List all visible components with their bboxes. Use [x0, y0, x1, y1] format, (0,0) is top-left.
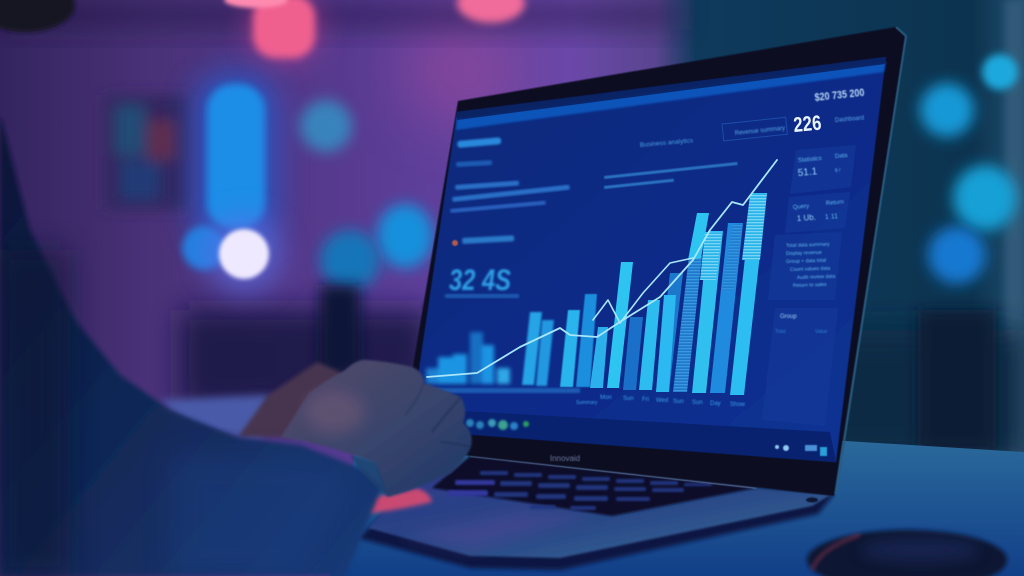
painting on wall: [104, 95, 189, 210]
side panel texts: Value: [815, 329, 828, 335]
side panel texts: Display revenue: [786, 250, 822, 257]
axis labels: Summary: [576, 400, 598, 406]
header labels: 226: [792, 112, 822, 137]
head silhouette at top left: [0, 0, 75, 32]
side panel texts: Group + data total: [786, 258, 826, 265]
side panel texts: 9 /: [835, 167, 841, 174]
header labels: Dashboard: [835, 115, 864, 124]
computer mouse: [807, 530, 1007, 576]
side panel texts: 1 Ub.: [797, 213, 816, 223]
neon blue pillar and white orb lamp: [182, 70, 282, 292]
side panel texts: Data: [835, 153, 848, 160]
low blurred bars: [426, 332, 510, 384]
axis labels: Show: [730, 402, 746, 408]
laptop lid and bezel: [403, 27, 906, 496]
bars: [522, 312, 542, 385]
axis labels: Fri: [642, 397, 649, 403]
side panel texts: [775, 153, 848, 335]
left metric text: 32 4S: [449, 264, 511, 297]
blurred background lights: left: [300, 100, 433, 375]
trend lines: [427, 160, 777, 377]
laptop brand label: Innovaid: [550, 454, 580, 463]
blurred background lights: right: [918, 54, 1018, 450]
hand: back hand: [238, 362, 342, 437]
header labels: $20 735 200: [814, 87, 865, 104]
side panel texts: Return to sales: [793, 282, 827, 289]
header labels: [640, 87, 865, 149]
laptop screen: [410, 57, 886, 462]
keyboard: [432, 456, 756, 516]
axis labels: Wed: [656, 398, 668, 404]
side panel texts: Count values data: [790, 266, 831, 273]
axis labels: Sun: [692, 400, 703, 406]
axis labels: Day: [710, 401, 721, 407]
top header band: [456, 62, 886, 130]
axis labels: [576, 395, 746, 408]
laptop base: [358, 466, 834, 570]
side panel texts: Statistics: [798, 156, 822, 164]
hand: pink fingertip reflection: [364, 488, 432, 514]
side panel texts: Group: [780, 314, 797, 320]
bar chart: [426, 193, 767, 395]
header labels: Business analytics: [640, 137, 694, 149]
header labels: Revenue summary: [735, 126, 785, 137]
left metric text: [445, 137, 738, 298]
side panel texts: 1 11: [825, 213, 838, 221]
side panels: [762, 145, 856, 426]
side panel texts: Query: [793, 204, 809, 211]
side panel texts: Return: [826, 199, 844, 207]
axis labels: Mon: [600, 395, 612, 401]
dashboard background: [410, 57, 886, 462]
ceiling lights: pink: [224, 0, 525, 62]
axis labels: Sun: [673, 399, 684, 405]
side panel texts: Total data summary: [786, 241, 830, 249]
axis labels: Sun: [623, 396, 634, 402]
arm sleeve: [0, 115, 382, 576]
side panel texts: Audit review data: [797, 274, 836, 281]
side panel texts: 51.1: [797, 166, 818, 179]
side panel texts: Total: [775, 329, 786, 335]
bottom taskbar: [410, 408, 836, 462]
table surface: [160, 395, 1024, 576]
hand: front hand: [281, 360, 472, 497]
